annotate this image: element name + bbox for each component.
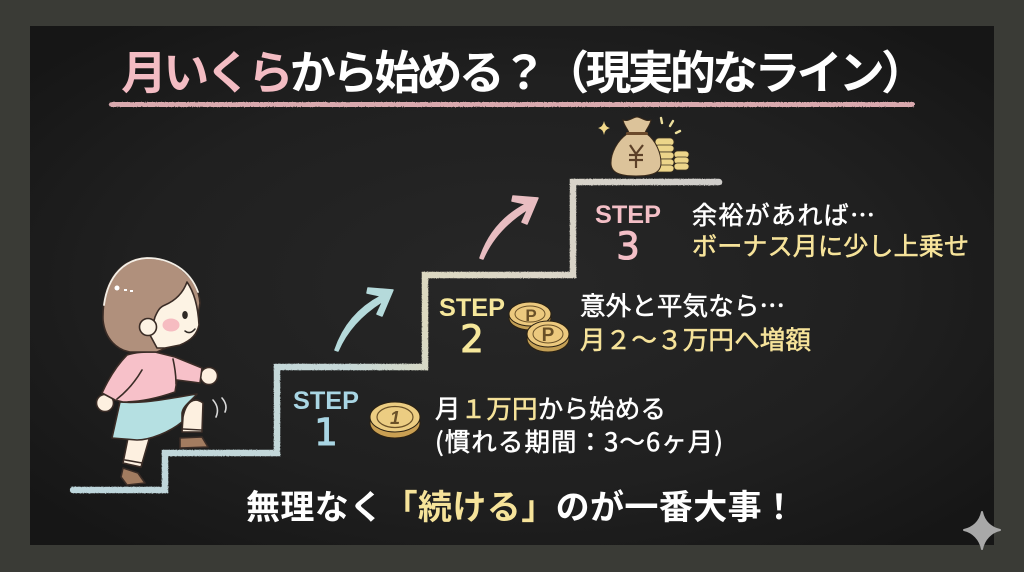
back leg (123, 436, 150, 467)
sparkle (598, 121, 610, 135)
step 1 label (293, 387, 359, 454)
bottom message: 無理なく「続ける」のが一番大事！ (246, 480, 796, 529)
title: 月いくらから始める？（現実的なライン） (121, 37, 927, 103)
yen sign (629, 145, 643, 168)
arrow: teal up step 2 (335, 288, 393, 351)
girl face details (114, 286, 195, 333)
hair back (103, 258, 200, 352)
coin stacks (655, 138, 689, 172)
step 2 text (580, 286, 811, 357)
step 1 label: STEP (293, 387, 359, 415)
money bag with coins (598, 117, 689, 176)
coins P: P (525, 306, 537, 325)
chalk staircase (73, 182, 719, 490)
step 3 label: STEP (595, 201, 661, 229)
bag neck (623, 117, 651, 133)
step 2 label: 2 (460, 318, 484, 361)
step 1 text: (慣れる期間：3〜6ヶ月) (435, 422, 723, 459)
face (150, 282, 199, 348)
back hand (96, 394, 114, 412)
back shoe (121, 468, 145, 485)
front sock line (183, 429, 201, 430)
icon: sparkle watermark (964, 512, 1000, 549)
step 3 label: 3 (616, 225, 640, 268)
coin 1 (370, 402, 420, 438)
skirt (112, 394, 197, 440)
bag body (611, 134, 661, 176)
coin 1: 1 (390, 408, 400, 428)
arrow: pink up step 3 (480, 196, 538, 259)
step 2 text: 意外と平気なら… (580, 286, 785, 323)
title underline (109, 102, 915, 107)
coins P: P (542, 325, 555, 346)
step 3 text: ボーナス月に少し上乗せ (692, 227, 969, 263)
step 3 text (692, 196, 969, 263)
step 1 text (435, 389, 723, 459)
ear (140, 318, 156, 336)
motion lines by knee (213, 398, 226, 417)
step 3 text: 余裕があれば… (692, 196, 875, 232)
back sock line (125, 460, 142, 463)
front shoe (180, 437, 208, 448)
front hand (200, 368, 218, 384)
step 3 label (595, 201, 661, 268)
sweater (102, 352, 202, 402)
girl chalk highlight (104, 258, 198, 305)
step 1 label: 1 (314, 411, 338, 454)
step 1 text: 月１万円から始める (435, 389, 666, 426)
step 2 text: 月２〜３万円へ増額 (580, 320, 811, 357)
illustration: girl climbing (96, 258, 218, 485)
step 2 label: STEP (439, 294, 505, 322)
sweater arm lines (117, 370, 142, 399)
coin rays (661, 118, 680, 133)
coins P (509, 302, 569, 352)
step 2 label (439, 294, 505, 361)
front leg (182, 400, 203, 432)
